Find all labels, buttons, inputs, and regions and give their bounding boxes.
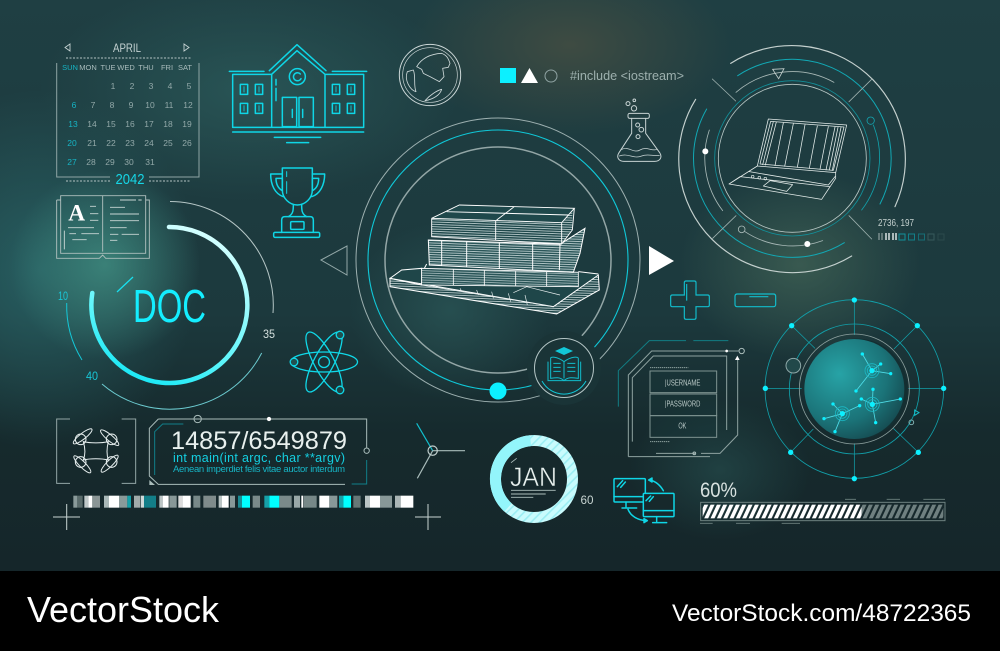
calendar days: 15 (106, 119, 116, 129)
calendar days: 8 (110, 100, 115, 110)
bracket frame (57, 419, 136, 483)
calendar days: 28 (86, 157, 96, 167)
panel: radar (763, 297, 946, 481)
brand name: VectorStock (27, 589, 220, 630)
icon: open book with letter: A (68, 201, 85, 227)
icon: tri-line node (417, 423, 465, 478)
icon: plus (671, 281, 709, 319)
icon: atom (290, 328, 358, 396)
calendar weekday names: WED (117, 63, 135, 72)
coordinates label: 2736, 197 (878, 218, 914, 229)
calendar days (67, 81, 193, 167)
radar outer nodes (763, 297, 946, 481)
calendar days: 7 (91, 100, 96, 110)
calendar weekday names: SUN (62, 63, 78, 72)
calendar days: 14 (87, 119, 97, 129)
calendar frame (57, 63, 199, 177)
calendar days: 5 (187, 81, 192, 91)
dial arcs (679, 46, 905, 273)
calendar days: 13 (68, 119, 78, 129)
calendar weekday names: FRI (161, 63, 173, 72)
icon: globe (399, 44, 461, 106)
badge: reading book (527, 331, 601, 405)
ring hatched portion (496, 440, 572, 518)
calendar weekday names: TUE (100, 63, 116, 72)
panel: laptop dial (679, 46, 905, 273)
calendar year (66, 171, 191, 188)
calendar days: 3 (149, 81, 154, 91)
icon: school building (229, 45, 367, 143)
calendar days: 21 (87, 138, 97, 148)
calendar days: 17 (144, 119, 154, 129)
calendar days: 31 (145, 157, 155, 167)
calendar days: 19 (182, 119, 192, 129)
footer band (0, 571, 1000, 651)
login frame lines (618, 341, 744, 457)
crosshair left (53, 504, 80, 530)
progress dot (490, 382, 506, 400)
gauge value 40: 40 (86, 369, 98, 383)
bottom book (390, 264, 599, 314)
gauge value 35: 35 (263, 327, 275, 341)
calendar month header (65, 41, 191, 58)
readout code: int main(int argc, char **argv) (173, 451, 345, 465)
calendar days: 16 (125, 119, 135, 129)
calendar weekday names: THU (138, 63, 154, 72)
radar disc (799, 334, 909, 444)
calendar days: 22 (106, 138, 116, 148)
icon: minus (735, 294, 776, 307)
login micro captions (650, 368, 688, 442)
login username: |USERNAME (665, 378, 700, 387)
panel: DOC gauge (58, 202, 275, 409)
calendar weekday names: MON (79, 63, 97, 72)
panel: login form (618, 341, 744, 457)
readout frame (149, 415, 369, 485)
ring underlines (511, 458, 556, 497)
icon: synced monitors (614, 478, 674, 523)
icon: trophy (271, 168, 325, 237)
login fields (650, 371, 717, 437)
icon: flask (618, 99, 661, 161)
gauge outer arcs (67, 202, 273, 409)
panel: drone bracket (57, 419, 136, 483)
progress label: 60% (700, 479, 737, 502)
calendar days: 12 (183, 100, 193, 110)
progress track (700, 499, 945, 523)
code label: #include <iostream> (570, 68, 684, 83)
calendar days: 24 (144, 138, 154, 148)
ring value: 60 (580, 493, 594, 507)
panel: central books ring (356, 118, 640, 405)
panel: data readout (149, 415, 369, 485)
middle book (428, 228, 585, 272)
barcode strip (73, 496, 413, 508)
calendar weekday names: SAT (178, 63, 192, 72)
calendar days: 25 (163, 138, 173, 148)
image reference: VectorStock.com/48722365 (672, 600, 971, 627)
calendar month header: APRIL (113, 41, 141, 55)
ring solid portion (495, 441, 530, 508)
login password: |PASSWORD (665, 400, 701, 409)
calendar days: 30 (124, 157, 134, 167)
calendar days: 6 (72, 100, 77, 110)
gauge ring (91, 227, 247, 383)
lower middle book (422, 268, 578, 287)
panel: JAN ring (495, 440, 594, 518)
gauge value 10: 10 (58, 289, 68, 303)
panel: progress bar (700, 479, 945, 523)
top book (432, 205, 574, 244)
icon: laptop (729, 119, 847, 199)
arrow: left triangle (321, 246, 347, 275)
icon: drone (72, 427, 121, 475)
calendar days: 1 (111, 81, 116, 91)
legend shapes (500, 68, 557, 83)
calendar weekday names (62, 63, 192, 72)
ring label: JAN (510, 462, 557, 492)
calendar days: 20 (67, 138, 77, 148)
calendar days: 2 (130, 81, 135, 91)
calendar year: 2042 (116, 171, 144, 188)
gauge title: DOC (133, 280, 206, 332)
calendar days: 18 (163, 119, 173, 129)
panel: calendar (57, 41, 199, 188)
central rings (356, 118, 640, 402)
calendar days: 29 (105, 157, 115, 167)
calendar days: 4 (168, 81, 173, 91)
radar rings and spokes (765, 300, 944, 479)
arrow: right triangle (649, 246, 674, 275)
calendar days: 9 (129, 100, 134, 110)
readout caption: Aenean imperdiet felis vitae auctor interdum (173, 464, 345, 475)
crosshair right (415, 504, 441, 530)
calendar days: 27 (67, 157, 77, 167)
login ok: OK (678, 422, 687, 431)
radar markers (786, 358, 919, 425)
icon: stacked books (390, 205, 599, 314)
radar network (822, 352, 902, 433)
calendar days: 11 (165, 100, 174, 110)
icon: open book with letter (57, 196, 149, 258)
calendar days: 26 (182, 138, 192, 148)
calendar days: 23 (125, 138, 135, 148)
readout number: 14857/6549879 (171, 427, 347, 455)
calendar days: 10 (145, 100, 155, 110)
signal squares (879, 233, 944, 240)
